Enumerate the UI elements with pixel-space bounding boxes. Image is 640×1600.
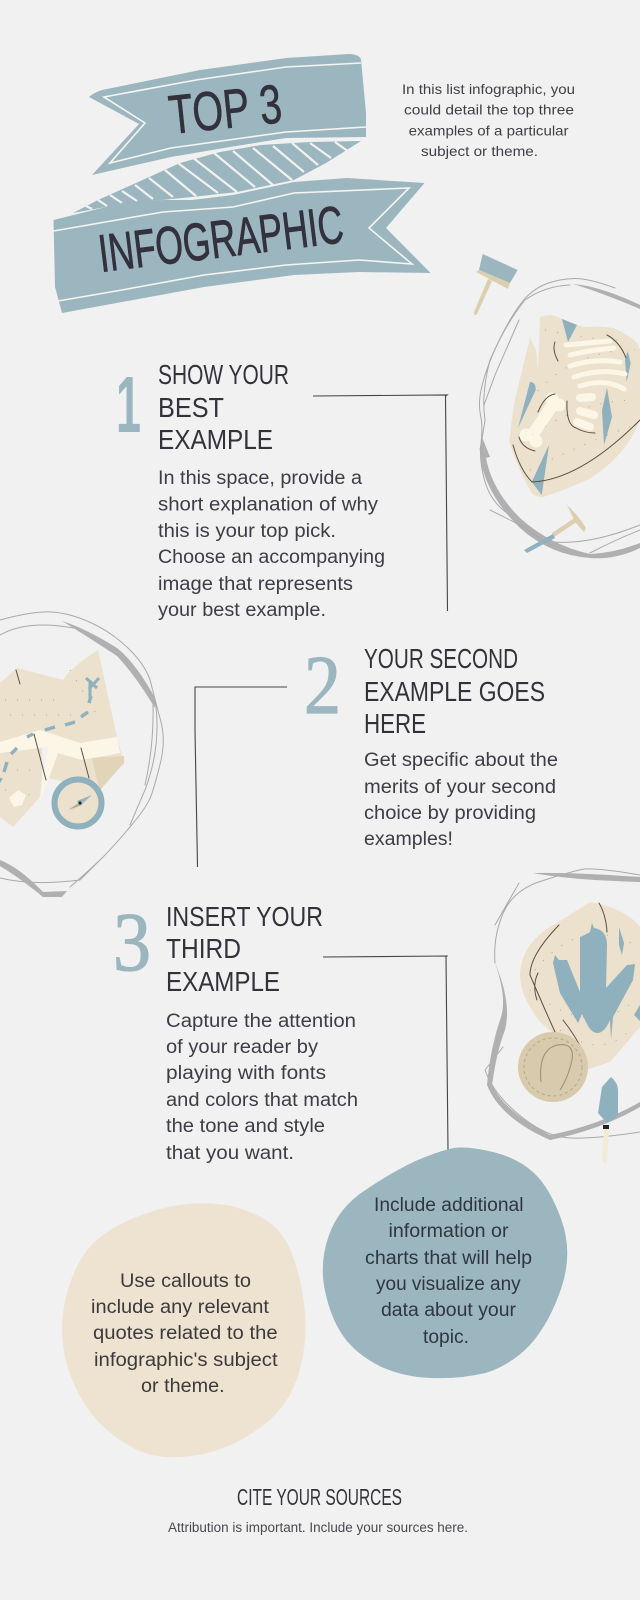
illustration: fossil dig with ribs and bone: [474, 254, 640, 558]
footer: sources: [168, 1484, 468, 1535]
body 3: the tone and style: [166, 1116, 325, 1137]
fossil stone: [520, 902, 640, 1071]
body 3: that you want.: [166, 1143, 294, 1164]
body 2: examples!: [364, 829, 453, 850]
connector 1: [313, 395, 448, 611]
callout: additional information: data about your: [381, 1300, 517, 1321]
fossil: bone: [520, 392, 566, 448]
callout: additional information: [323, 1148, 567, 1378]
number 2: 2: [304, 639, 341, 732]
callout: quotes: quotes related to the: [93, 1323, 278, 1344]
icon: brush: [474, 254, 518, 315]
fossil: cracks: [513, 335, 640, 482]
footer text: Attribution is important. Include your sources here.: [168, 1520, 468, 1535]
banner: top ribbon: [89, 54, 366, 175]
body 1: short explanation of why: [158, 494, 379, 516]
body 2: Get specific about the: [364, 750, 558, 771]
callout: additional information: charts that will help: [365, 1248, 532, 1269]
callout: quotes: or theme.: [141, 1376, 225, 1397]
heading 1: [158, 359, 289, 455]
section 3: [113, 896, 448, 1164]
banner: striped fold: [73, 141, 361, 213]
body 3: of your reader by: [166, 1037, 319, 1058]
footprint: [553, 923, 640, 1040]
ring outline: [485, 869, 640, 1140]
section 2: [195, 639, 558, 867]
heading 3: [166, 901, 323, 997]
number 3: 3: [113, 896, 151, 989]
body 1: In this space, provide a: [158, 468, 362, 489]
heading 2: YOUR SECOND: [364, 643, 518, 674]
body 3: Capture the attention: [166, 1011, 356, 1032]
intro text: subject or theme.: [421, 143, 538, 159]
body 1: your best example.: [158, 600, 326, 621]
intro text: [402, 81, 575, 159]
heading 3: THIRD: [166, 933, 241, 964]
heading 3: INSERT YOUR: [166, 901, 323, 932]
icon: compass: [54, 780, 102, 826]
callout: additional information: topic.: [423, 1327, 469, 1348]
body 2: choice by providing: [364, 803, 536, 824]
heading 3: EXAMPLE: [166, 966, 280, 997]
callout: quotes: [62, 1203, 306, 1457]
intro text: could detail the top three: [404, 102, 574, 118]
heading 2: [364, 643, 545, 739]
callout: additional information: you visualize any: [376, 1274, 521, 1295]
body 3: [166, 1011, 358, 1164]
body 1: [158, 468, 385, 621]
heading 1: SHOW YOUR: [158, 359, 289, 390]
intro text: examples of a particular: [409, 122, 569, 138]
ring outline: [0, 612, 163, 897]
illustration: dinosaur footprint and coin: [485, 869, 640, 1164]
intro text: In this list infographic, you: [402, 81, 575, 97]
coin: [518, 1032, 588, 1102]
section 1: [116, 359, 448, 621]
fossil stone: [509, 315, 640, 497]
body 1: this is your top pick.: [158, 521, 336, 542]
map: dashed route: [0, 678, 99, 782]
icon: hammer: [524, 505, 586, 553]
callout: quotes: infographic's subject: [94, 1350, 278, 1371]
title banner: [54, 54, 431, 313]
body 2: merits of your second: [364, 777, 556, 798]
banner: lower ribbon: [54, 178, 431, 313]
body 3: and colors that match: [166, 1090, 358, 1111]
footer heading: CITE YOUR SOURCES: [237, 1484, 402, 1510]
banner text: TOP 3: TOP 3: [166, 72, 285, 146]
illustration: treasure map and compass: [0, 612, 163, 897]
heading 2: HERE: [364, 708, 426, 739]
connector 3: [323, 956, 448, 1150]
callout: quotes: include any relevant: [91, 1297, 270, 1318]
callout: quotes: Use callouts to: [120, 1271, 251, 1292]
connector 2: [195, 687, 287, 867]
fossil: blue stones: [518, 319, 631, 495]
body 3: playing with fonts: [166, 1063, 326, 1084]
number 1: 1: [116, 360, 141, 449]
heading 2: EXAMPLE GOES: [364, 676, 545, 707]
fossil: ribs: [566, 341, 625, 427]
body 1: Choose an accompanying: [158, 547, 385, 568]
ring outline: [479, 278, 640, 558]
banner text: INFOGRAPHIC: INFOGRAPHIC: [95, 195, 347, 284]
fossil cracks: [530, 903, 607, 1055]
heading 1: EXAMPLE: [158, 424, 273, 455]
body 1: image that represents: [158, 574, 353, 595]
icon: trowel: [598, 1077, 618, 1164]
body 2: [364, 750, 558, 850]
callout: additional information: information or: [388, 1221, 509, 1242]
heading 1: BEST: [158, 392, 224, 423]
map: [0, 650, 124, 827]
callout: additional information: Include additional: [374, 1195, 524, 1216]
